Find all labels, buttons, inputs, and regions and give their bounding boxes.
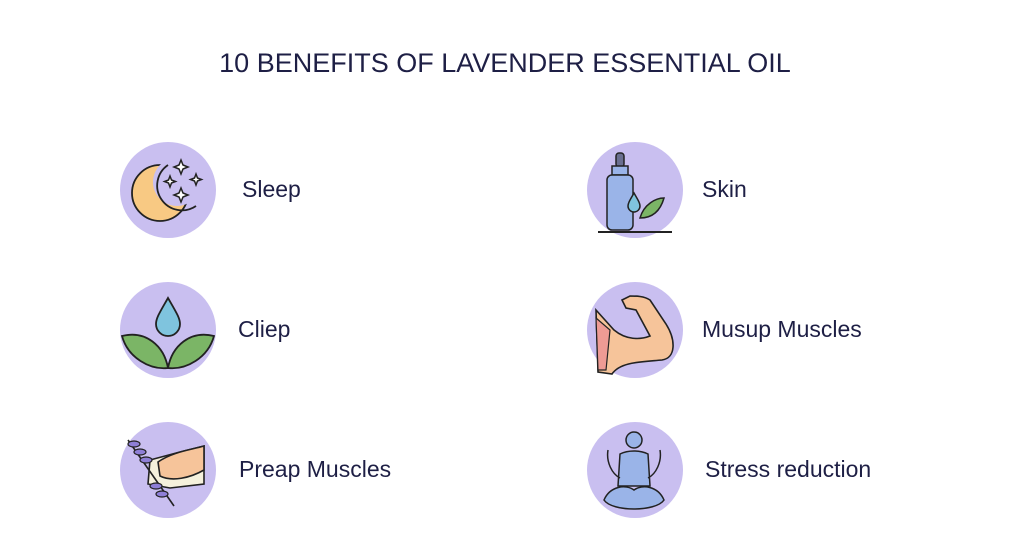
item: preap muscles [120, 422, 391, 518]
item: stress reduction [587, 422, 871, 518]
label: Cliep: Cliep [238, 316, 290, 342]
item: sleep [120, 142, 301, 238]
icon: dropper bottle [587, 142, 683, 238]
label: Skin: Skin [702, 176, 747, 202]
icon: flexed arm [587, 282, 683, 378]
title: 10 BENEFITS OF LAVENDER ESSENTIAL OIL [219, 48, 791, 78]
item: musup muscles [587, 282, 862, 378]
icon: meditating person [587, 422, 683, 518]
item: skin [587, 142, 747, 238]
label: Preap Muscles: Preap Muscles [239, 456, 391, 482]
item: cliep [120, 282, 290, 378]
label: Stress reduction: Stress reduction [705, 456, 871, 482]
icon: lavender and hand [120, 422, 216, 518]
label: Sleep: Sleep [242, 176, 301, 202]
label: Musup Muscles: Musup Muscles [702, 316, 862, 342]
icon: moon and stars [120, 142, 216, 238]
icon: drop and leaves [120, 282, 216, 378]
